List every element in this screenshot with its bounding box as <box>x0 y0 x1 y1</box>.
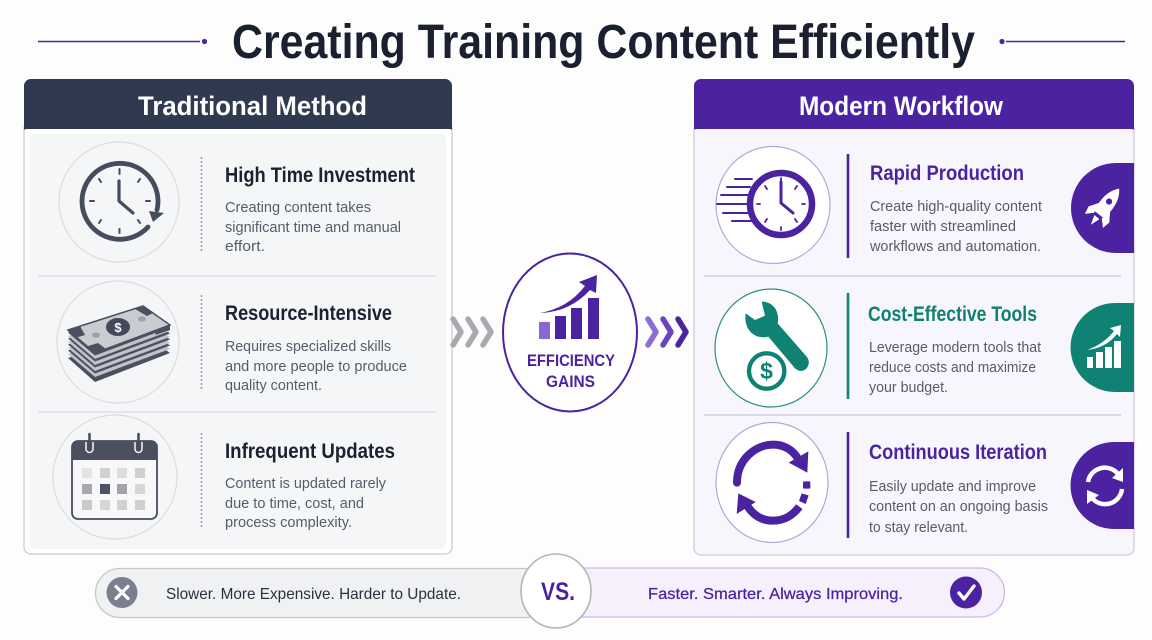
text block: effort. <box>225 238 265 255</box>
heading: Infrequent Updates <box>225 440 395 463</box>
text block: and more people to produce <box>225 358 407 375</box>
icon: wrench and coin <box>715 289 827 407</box>
text block <box>225 338 407 394</box>
text block: your budget. <box>869 379 948 396</box>
icon: fast clock <box>716 146 830 264</box>
badge: growth chart <box>1071 303 1134 392</box>
badge: rocket <box>1071 163 1134 253</box>
item: continuous iteration <box>716 422 1134 542</box>
panel: traditional method <box>24 79 452 554</box>
text block <box>869 198 1043 255</box>
badge: sync <box>1070 442 1134 529</box>
item: cost-effective tools <box>715 289 1134 407</box>
arrows: modern chevrons <box>648 319 686 345</box>
right summary <box>575 568 1004 617</box>
icon: clock with arrow <box>59 142 179 262</box>
arrows: traditional chevrons <box>453 319 491 345</box>
icon: stack of money: $ <box>114 320 122 335</box>
icon: x mark <box>106 577 138 608</box>
callout: efficiency gains: GAINS <box>546 372 595 391</box>
text block: Creating content takes <box>225 199 371 216</box>
vs badge: VS. <box>541 578 575 606</box>
left summary <box>96 568 540 618</box>
heading: Rapid Production <box>870 162 1024 185</box>
icon: rising bar chart <box>539 275 599 339</box>
text block: Easily update and improve <box>869 478 1036 495</box>
text block: significant time and manual <box>225 219 401 236</box>
text block: workflows and automation. <box>869 238 1041 255</box>
icon: check mark <box>950 576 982 608</box>
text block: Content is updated rarely <box>225 475 386 492</box>
text block: to stay relevant. <box>869 519 968 536</box>
text block <box>225 475 386 531</box>
text block: reduce costs and maximize <box>869 359 1036 376</box>
heading: High Time Investment <box>225 164 415 187</box>
comparison bar <box>96 554 1004 628</box>
item: high time investment <box>59 142 415 262</box>
right summary: Faster. Smarter. Always Improving. <box>648 586 903 603</box>
header: modern workflow <box>694 79 1134 130</box>
item: infrequent updates <box>53 415 395 539</box>
heading: Continuous Iteration <box>869 441 1047 464</box>
panel: modern workflow <box>96 79 1134 628</box>
icon: wrench and coin: $ <box>760 358 773 384</box>
vs badge <box>521 554 591 628</box>
title: Creating Training Content Efficiently <box>232 16 975 69</box>
text block: process complexity. <box>225 514 352 531</box>
text block: due to time, cost, and <box>225 495 364 512</box>
text block: quality content. <box>225 377 322 394</box>
item: resource-intensive <box>57 281 407 403</box>
text block: content on an ongoing basis <box>869 498 1048 515</box>
icon: calendar <box>53 415 177 539</box>
heading: Resource-Intensive <box>225 302 392 325</box>
header: modern workflow: Modern Workflow <box>799 91 1004 121</box>
callout: efficiency gains: EFFICIENCY <box>527 351 616 370</box>
text block: Create high-quality content <box>870 198 1043 215</box>
callout: efficiency gains <box>503 254 637 412</box>
icon: cycle arrows <box>716 422 828 542</box>
text block <box>225 199 401 255</box>
text block: Leverage modern tools that <box>869 339 1042 356</box>
header: traditional method <box>24 79 452 130</box>
text block <box>869 478 1048 536</box>
text block <box>869 339 1042 396</box>
text block: Requires specialized skills <box>225 338 391 355</box>
header: traditional method: Traditional Method <box>138 91 367 121</box>
left summary: Slower. More Expensive. Harder to Update. <box>166 586 461 603</box>
heading: Cost-Effective Tools <box>868 303 1037 326</box>
icon: stack of money <box>57 281 179 403</box>
text block: faster with streamlined <box>870 218 1016 235</box>
item: rapid production <box>716 146 1134 264</box>
